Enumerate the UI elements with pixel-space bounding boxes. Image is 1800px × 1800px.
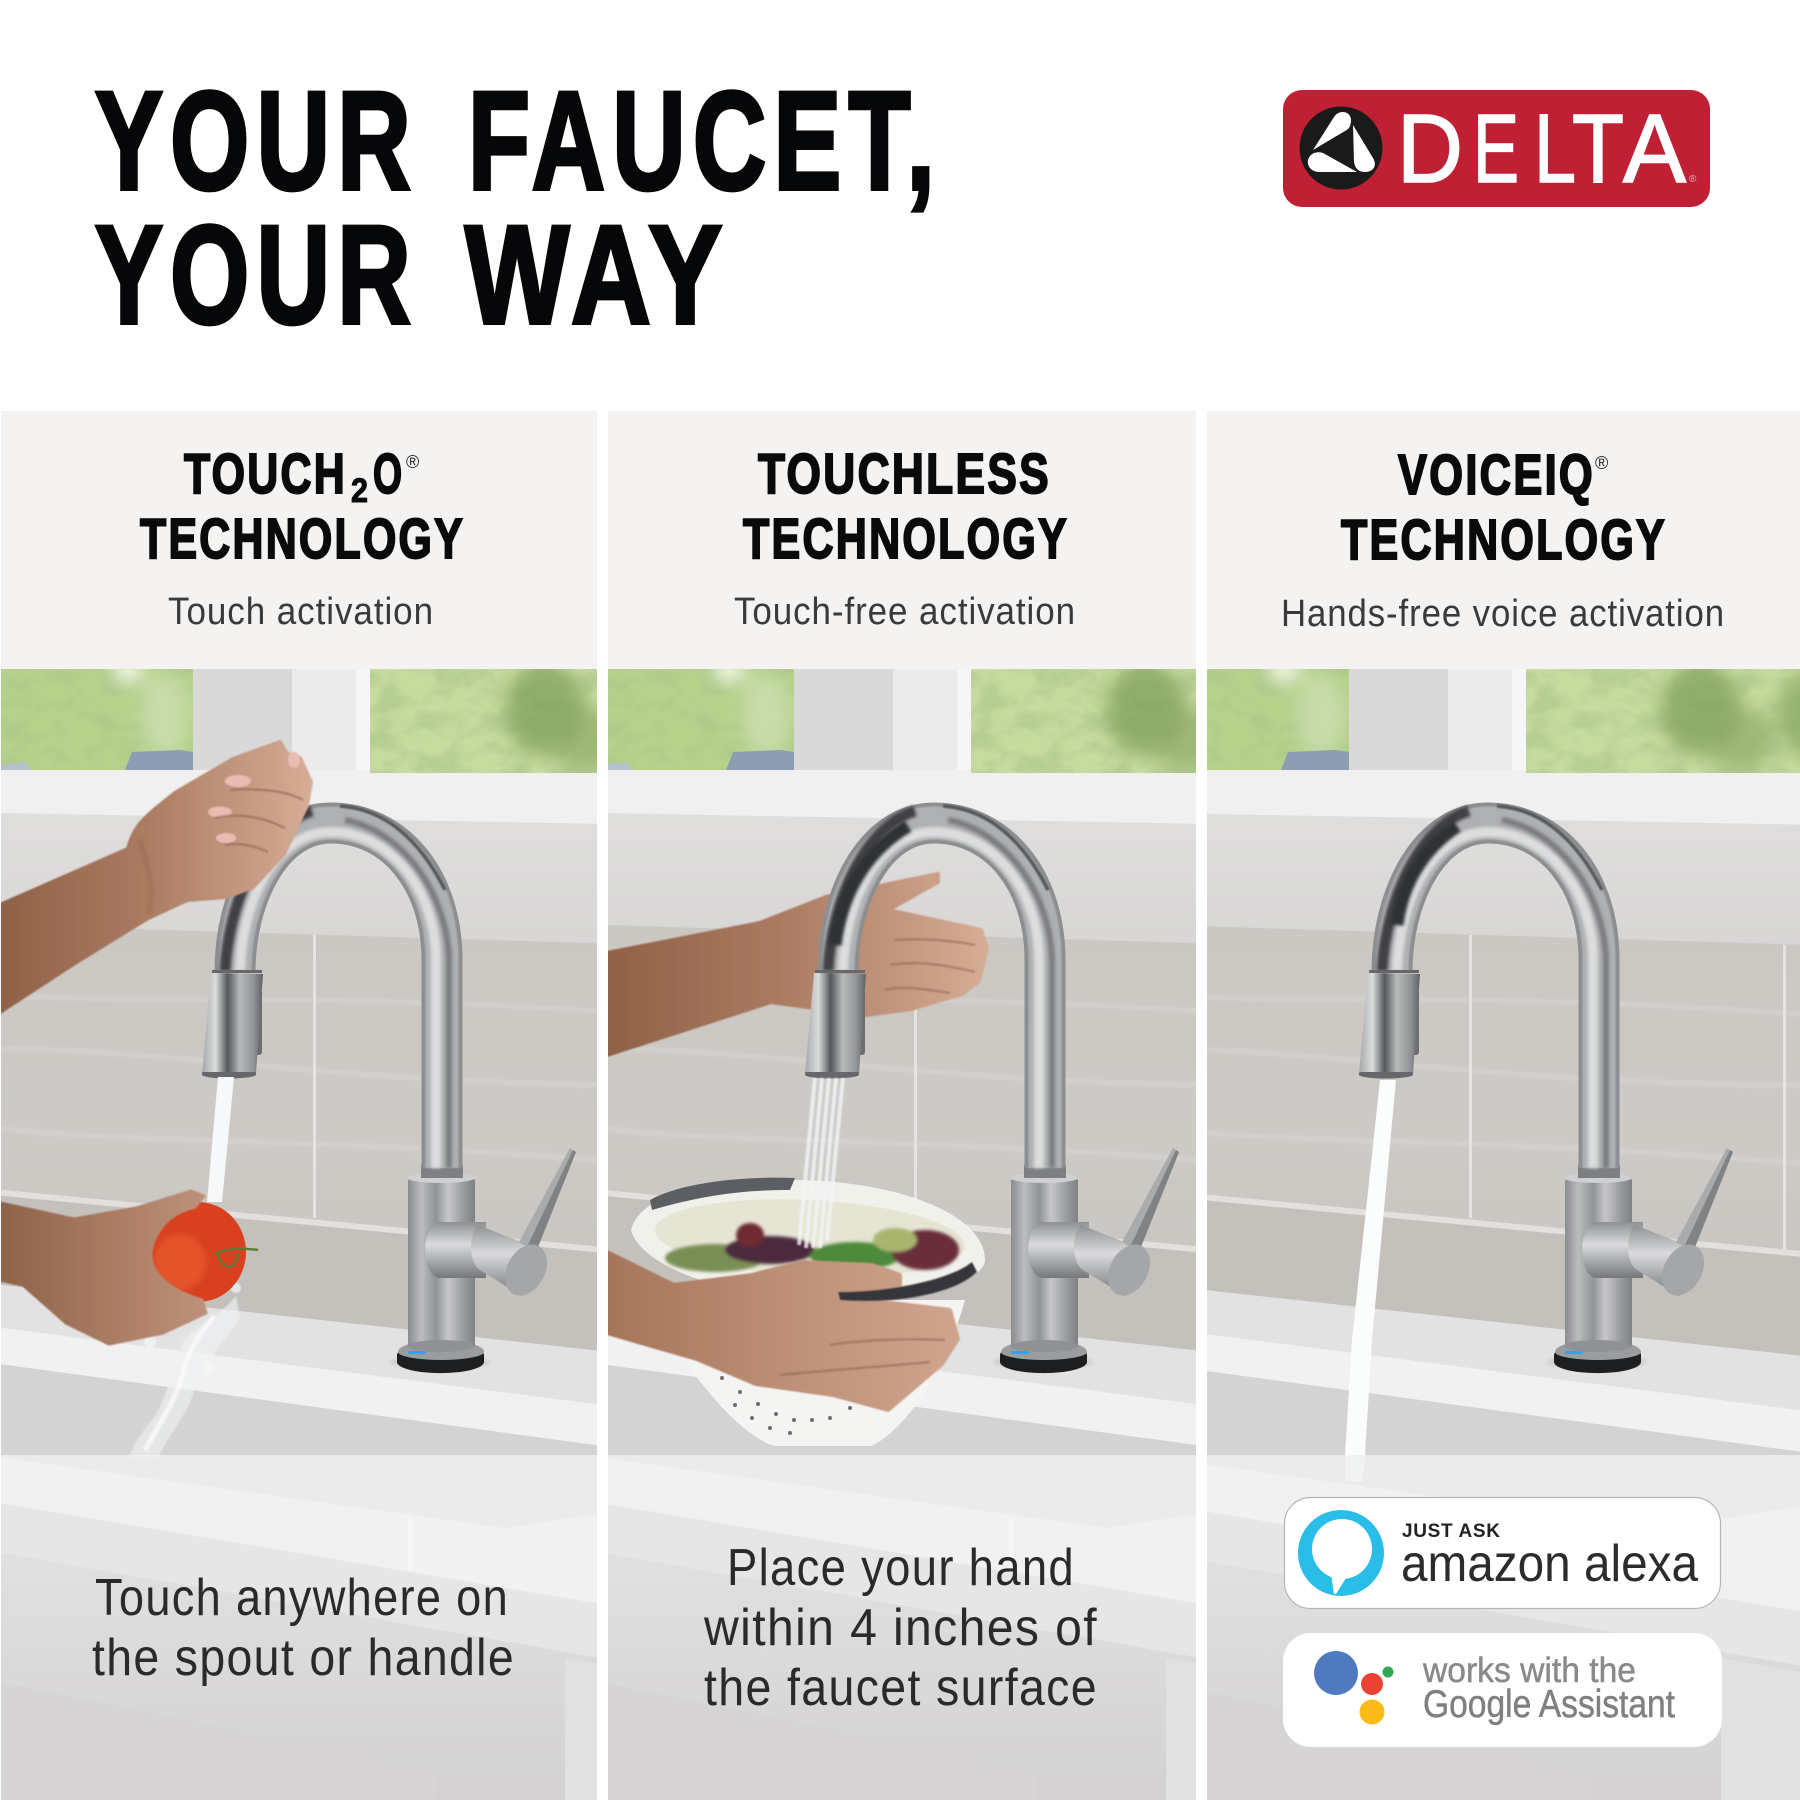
logo: Delta: E <box>1473 94 1519 203</box>
title: WAY <box>465 196 730 350</box>
hand holding tomato <box>0 1191 206 1344</box>
faucet <box>805 806 1179 1373</box>
panel header <box>1207 411 1800 669</box>
panel: VoiceIQ technology <box>1207 411 1800 1800</box>
caption: Place your hand: Place your hand <box>727 1539 1075 1597</box>
panel: Touchless technology <box>608 411 1196 1800</box>
tomato <box>150 1202 258 1302</box>
logo: Delta: A <box>1623 94 1686 203</box>
badge: Google Assistant: Google Assistant <box>1423 1683 1675 1726</box>
logo: Delta: ® <box>1689 174 1697 185</box>
hand holding bowl <box>607 1252 977 1410</box>
panel header <box>608 411 1196 669</box>
badge: Amazon Alexa <box>1284 1498 1720 1608</box>
bowl <box>631 1178 985 1446</box>
heading: Touchless Technology <box>743 442 1069 571</box>
subheading: Touch-free activation: Touch-free activation <box>734 591 1076 633</box>
heading: Touch2O Technology: ® <box>406 452 419 472</box>
heading: VoiceIQ Technology: ® <box>1595 453 1608 473</box>
panel: Touch2O technology <box>1 411 597 1800</box>
badge: Google Assistant: works with the <box>1422 1651 1636 1690</box>
icon: Delta triangle mark <box>1300 106 1382 190</box>
caption: Touch anywhere: the spout or handle <box>92 1629 515 1687</box>
caption: Place your hand <box>703 1539 1098 1717</box>
caption: Touch anywhere <box>92 1569 515 1687</box>
logo: Delta: T <box>1572 94 1624 203</box>
water spray <box>799 1078 843 1248</box>
title: YOUR <box>95 196 418 350</box>
badge: Google Assistant <box>1283 1633 1722 1747</box>
icon: Alexa ring <box>1298 1510 1384 1596</box>
water stream <box>1345 1080 1396 1482</box>
heading: Touch2O Technology: TECHNOLOGY <box>140 507 465 571</box>
faucet <box>202 806 576 1373</box>
heading: VoiceIQ Technology <box>1341 443 1667 572</box>
faucet <box>1359 806 1733 1373</box>
caption: Place your hand: within 4 inches of <box>703 1599 1098 1657</box>
photo: kitchen background <box>541 658 1321 1800</box>
heading: Touchless Technology: TECHNOLOGY <box>743 507 1069 571</box>
hand touching spout <box>0 742 311 1012</box>
icon: Google Assistant dots <box>1314 1651 1394 1724</box>
heading: Touch2O Technology: 2 <box>351 472 368 510</box>
heading: Touch2O Technology: TOUCH <box>184 442 347 506</box>
heading: Touch2O Technology: O <box>373 442 404 506</box>
logo: Delta <box>1283 90 1710 207</box>
heading: Touch2O Technology <box>140 442 465 571</box>
badge: Amazon Alexa: JUST ASK <box>1402 1521 1500 1542</box>
logo: Delta: D <box>1397 94 1463 203</box>
water stream <box>207 1077 234 1202</box>
photo: kitchen background <box>1096 658 1800 1800</box>
photo: kitchen background <box>0 658 720 1800</box>
logo: Delta: L <box>1534 94 1576 203</box>
subheading: Hands-free voice activation: Hands-free voice activation <box>1281 593 1725 635</box>
badge: Amazon Alexa: amazon alexa <box>1401 1535 1698 1593</box>
panel header <box>1 411 597 669</box>
heading: VoiceIQ Technology: TECHNOLOGY <box>1341 508 1667 572</box>
caption: Touch anywhere: Touch anywhere on <box>95 1569 509 1627</box>
heading: VoiceIQ Technology: VOICEIQ <box>1398 443 1595 507</box>
title <box>94 70 942 350</box>
heading: Touchless Technology: TOUCHLESS <box>758 442 1051 506</box>
subheading: Touch activation: Touch activation <box>168 591 434 633</box>
water splash <box>128 1283 241 1458</box>
hand near spout <box>607 874 987 1055</box>
caption: Place your hand: the faucet surface <box>704 1659 1098 1717</box>
